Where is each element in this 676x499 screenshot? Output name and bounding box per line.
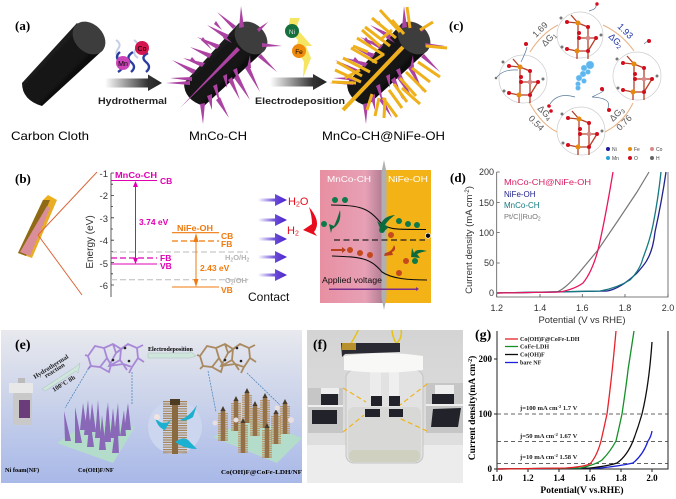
molecule top (560, 15, 602, 59)
chart legend: Co(OH)F@CoFe-LDH (520, 336, 580, 343)
MnCo-CH band levels: CB (160, 176, 172, 186)
blue bubbles (576, 61, 594, 90)
curve: bare NF (497, 431, 652, 469)
icon: Ni and Fe precursors: Fe (295, 49, 303, 56)
delta G4 value (527, 103, 555, 133)
reference labels: j=10 mA cm (520, 454, 554, 461)
Co(OH)F/NF label: Co(OH)F/NF (78, 467, 114, 474)
redox labels: /OH (234, 276, 247, 285)
redox labels: - (247, 277, 249, 283)
arrow: hydrothermal reaction (42, 363, 80, 391)
delta G4 value: 0.54 (527, 113, 546, 133)
hydrothermal label: Hydrothermal (98, 96, 167, 107)
chart legend: bare NF (520, 360, 542, 366)
MnCo-CH label: MnCo-CH (189, 129, 247, 143)
reference labels: 1.58 V (558, 454, 578, 461)
atom legend (606, 147, 663, 162)
panel b: band alignment (15, 160, 431, 310)
chart legend: Pt/C||RuO (504, 212, 538, 221)
dashed projection lines right (208, 371, 280, 412)
energy axis: Energy (eV) (85, 215, 96, 269)
redox labels: O/H (233, 253, 247, 262)
left inset (308, 388, 343, 433)
delta G2 value (606, 21, 635, 52)
electrodeposition label: Electrodeposition (255, 96, 345, 107)
Ni foam label: Ni foam(NF) (5, 467, 39, 474)
hydrothermal reaction label (32, 353, 77, 394)
icon: autoclave (9, 378, 33, 425)
hydrothermal reaction label: reaction (43, 362, 67, 380)
chart axes: 2.0 (646, 473, 658, 483)
chart axes: Potential(V vs.RHE) (540, 485, 624, 496)
redox labels: 2 (230, 258, 233, 264)
curve: CoFe-LDH (497, 331, 634, 469)
chart legend (505, 336, 580, 366)
energy axis: -2 (100, 191, 108, 202)
carbon cloth label: Carbon Cloth (11, 129, 89, 143)
panel d: polarisation curves (450, 167, 674, 326)
carbon cloth cylinder (22, 15, 112, 106)
reference lines (497, 414, 668, 464)
energy axis: -3 (100, 214, 108, 225)
chart legend (504, 178, 591, 222)
curve: Pt/C RuO2 (497, 172, 649, 293)
chart axes: 200 (478, 354, 492, 364)
chart axes: 1.2 (522, 473, 534, 483)
contact label: Contact (248, 290, 290, 304)
MnCo-CH band levels: MnCo-CH (115, 170, 157, 180)
atom legend: Fe (634, 147, 640, 153)
hydrothermal reaction label: Hydrothermal (32, 353, 70, 381)
H2O to H2: H (288, 196, 296, 208)
band bending diagram: Applied voltage (322, 276, 383, 285)
panel label d: (d) (450, 170, 466, 185)
panel e: synthesis illustration (1, 330, 302, 483)
Co(OH)F@CoFe-LDH array (212, 388, 302, 463)
atom legend: O (634, 156, 638, 162)
atom legend: Co (656, 147, 663, 153)
H2O to H2: 2 (295, 230, 299, 238)
chart axes: 1.0 (491, 473, 503, 483)
icon: Mn and Co precursors: Mn (118, 61, 128, 68)
curve: MnCo-CH@NiFe-OH (497, 172, 613, 293)
Co(OH)F needle array (57, 400, 135, 463)
brown CoFe-LDH crystal network (197, 344, 256, 373)
reference labels: j=100 mA cm (520, 405, 557, 412)
yellow dashed guides (343, 384, 427, 432)
icon: Mn and Co precursors: Co (138, 46, 147, 53)
electrodeposition label: Electrodeposition (148, 347, 194, 353)
reference labels: -2 (557, 404, 562, 409)
dashed projection lines left (65, 366, 132, 408)
contact arrows (258, 194, 287, 281)
MnCo-CH@NiFe-OH label: MnCo-CH@NiFe-OH (322, 129, 445, 143)
band bending diagram: NiFe-OH (388, 174, 428, 184)
energy axis: -4 (100, 236, 108, 247)
chart axes (464, 167, 674, 326)
chart legend: CoFe-LDH (520, 344, 549, 350)
atom legend: Ni (612, 147, 617, 153)
chart axes: 150 (479, 198, 494, 208)
chart axes: 50 (484, 258, 494, 268)
chart axes: 100 (478, 409, 492, 419)
redox labels: 2 (247, 258, 250, 264)
delta G3 value (607, 104, 634, 132)
table surface (307, 445, 463, 483)
icon: Ni and Fe precursors: Ni (289, 29, 295, 36)
panel label f: (f) (313, 338, 327, 353)
chart axes: ) (467, 356, 478, 359)
chart axes: -2 (468, 359, 474, 364)
delta G1 value: ΔG (539, 32, 556, 48)
chart axes: 1.6 (576, 303, 589, 313)
small adsorbate groups (495, 2, 651, 113)
band bending diagram: MnCo-CH (327, 174, 371, 184)
atom legend: Mn (612, 156, 619, 162)
delta G1 value: 1 (552, 33, 560, 40)
chart legend: Co(OH)F (520, 352, 545, 358)
chart axes: 1.2 (490, 303, 503, 313)
arrow: electrodeposition (270, 74, 327, 90)
MnCo-CH band levels: VB (160, 261, 172, 271)
delta G2 value: 1.93 (616, 21, 635, 41)
arrow: hydrothermal (105, 74, 162, 91)
Co(OH)F@CoFe-LDH label: Co(OH)F@CoFe-LDH/NF (221, 469, 302, 476)
jar lid (344, 353, 423, 372)
single core-shell needle (18, 195, 57, 258)
chart axes: 200 (479, 167, 494, 177)
photo background (307, 330, 463, 483)
delta G4 value: 4 (544, 116, 551, 124)
MnCo-CH needle array (166, 6, 282, 124)
chart axes: 0 (488, 464, 492, 474)
panel c: free energy cycle (449, 2, 663, 162)
chart axes: 1.8 (619, 303, 631, 313)
panel label g: (g) (475, 328, 492, 343)
redox labels: 2 (231, 280, 234, 286)
molecule left (502, 59, 544, 103)
chart axes: Current density(mA cm (468, 364, 478, 460)
chart legend: 2 (538, 216, 541, 222)
reference labels: j=50 mA cm (520, 433, 554, 440)
redox labels (225, 253, 250, 286)
chart legend: MnCo-CH (504, 201, 540, 210)
molecule bottom (560, 111, 604, 155)
reference labels: 1.67 V (558, 433, 578, 440)
delta G1 value (530, 20, 560, 49)
purple Co(OH)F crystal network (85, 344, 144, 373)
chart axes: 1.6 (584, 473, 596, 483)
H2O to H2: 2 (296, 202, 300, 208)
chart axes: 1.4 (553, 473, 565, 483)
band bending diagram (320, 160, 431, 310)
energy axis: -6 (100, 281, 108, 292)
reference labels: -2 (554, 453, 559, 458)
panel label c: (c) (449, 18, 463, 33)
chart axes: Current density (mA cm (464, 195, 475, 294)
H2O to H2: H (287, 225, 295, 237)
NiFe-OH band levels: NiFe-OH (177, 223, 213, 233)
molecule right (616, 56, 658, 100)
curve: NiFe-OH (497, 172, 666, 293)
MnCo-CH band levels: 3.74 eV (139, 217, 169, 227)
panel a: synthesis schematic (11, 6, 447, 143)
chart legend: MnCo-CH@NiFe-OH (504, 178, 591, 187)
chart axes: 1.4 (534, 303, 546, 313)
chart axes: 1.8 (615, 473, 627, 483)
reference labels: -2 (554, 432, 559, 437)
delta G3 value: ΔG (607, 107, 624, 123)
curve: Co(OH)F (497, 342, 652, 469)
panel f: electrolysis photo (307, 330, 463, 483)
right inset (426, 383, 463, 433)
panel label b: (b) (15, 171, 31, 186)
chart axes: 2.0 (662, 303, 674, 313)
chart axes: Potential (V vs RHE) (538, 315, 626, 326)
redox labels: H (225, 253, 230, 262)
submerged electrodes (365, 396, 403, 417)
NiFe-OH band levels: FB (221, 239, 232, 249)
yellow wires (350, 330, 401, 345)
H2O to H2 (287, 196, 317, 238)
MnCo-CH@NiFe-OH core-shell array (329, 6, 447, 124)
NiFe-OH band levels: VB (221, 285, 233, 295)
atom legend: H (656, 156, 660, 162)
delta G3 value: 3 (620, 108, 628, 115)
chart axes: 0 (489, 288, 494, 298)
chart axes: -2 (465, 189, 471, 195)
NiFe-OH band levels (172, 223, 233, 295)
panel background (1, 330, 302, 483)
H2O to H2: O (300, 196, 309, 208)
panel label e: (e) (15, 338, 31, 353)
panel label a: (a) (15, 18, 30, 33)
hydrothermal reaction label: 100°C 8h (51, 374, 77, 394)
energy axis (85, 169, 114, 297)
redox labels: O (225, 276, 231, 285)
water redox levels (111, 252, 248, 280)
chart axes: ) (464, 186, 475, 189)
inset magnified needle (148, 399, 202, 454)
energy axis: -5 (100, 259, 108, 270)
glass jar (346, 370, 423, 463)
MnCo-CH band levels: FB (160, 253, 171, 263)
electrode clamp (341, 343, 400, 357)
reaction cycle circles and arcs (499, 12, 661, 155)
chart axes: 100 (479, 228, 494, 238)
curve: MnCo-CH (497, 172, 661, 293)
MnCo-CH band levels (111, 170, 172, 271)
curve: Co(OH)F@CoFe-LDH (497, 331, 616, 469)
delta G1 value: 1.69 (530, 20, 550, 39)
reference labels (519, 404, 578, 461)
zoom lines (38, 172, 97, 295)
reference labels: 1.7 V (561, 405, 578, 412)
NiFe-OH band levels: 2.43 eV (200, 263, 230, 273)
icon: Ni and Fe precursors (285, 18, 312, 78)
delta G4 value: ΔG (536, 103, 552, 120)
delta G2 value: ΔG (607, 31, 623, 48)
arrow: electrodeposition (148, 351, 196, 358)
delta G3 value: 0.76 (614, 113, 634, 132)
NiFe-OH band levels: CB (221, 231, 233, 241)
panel g: LSV curves (467, 328, 668, 496)
energy axis: -1 (100, 169, 108, 180)
chart axes (467, 331, 668, 496)
icon: Mn and Co precursors (116, 40, 149, 72)
chart legend: NiFe-OH (504, 190, 536, 199)
delta G2 value: 2 (615, 44, 622, 52)
